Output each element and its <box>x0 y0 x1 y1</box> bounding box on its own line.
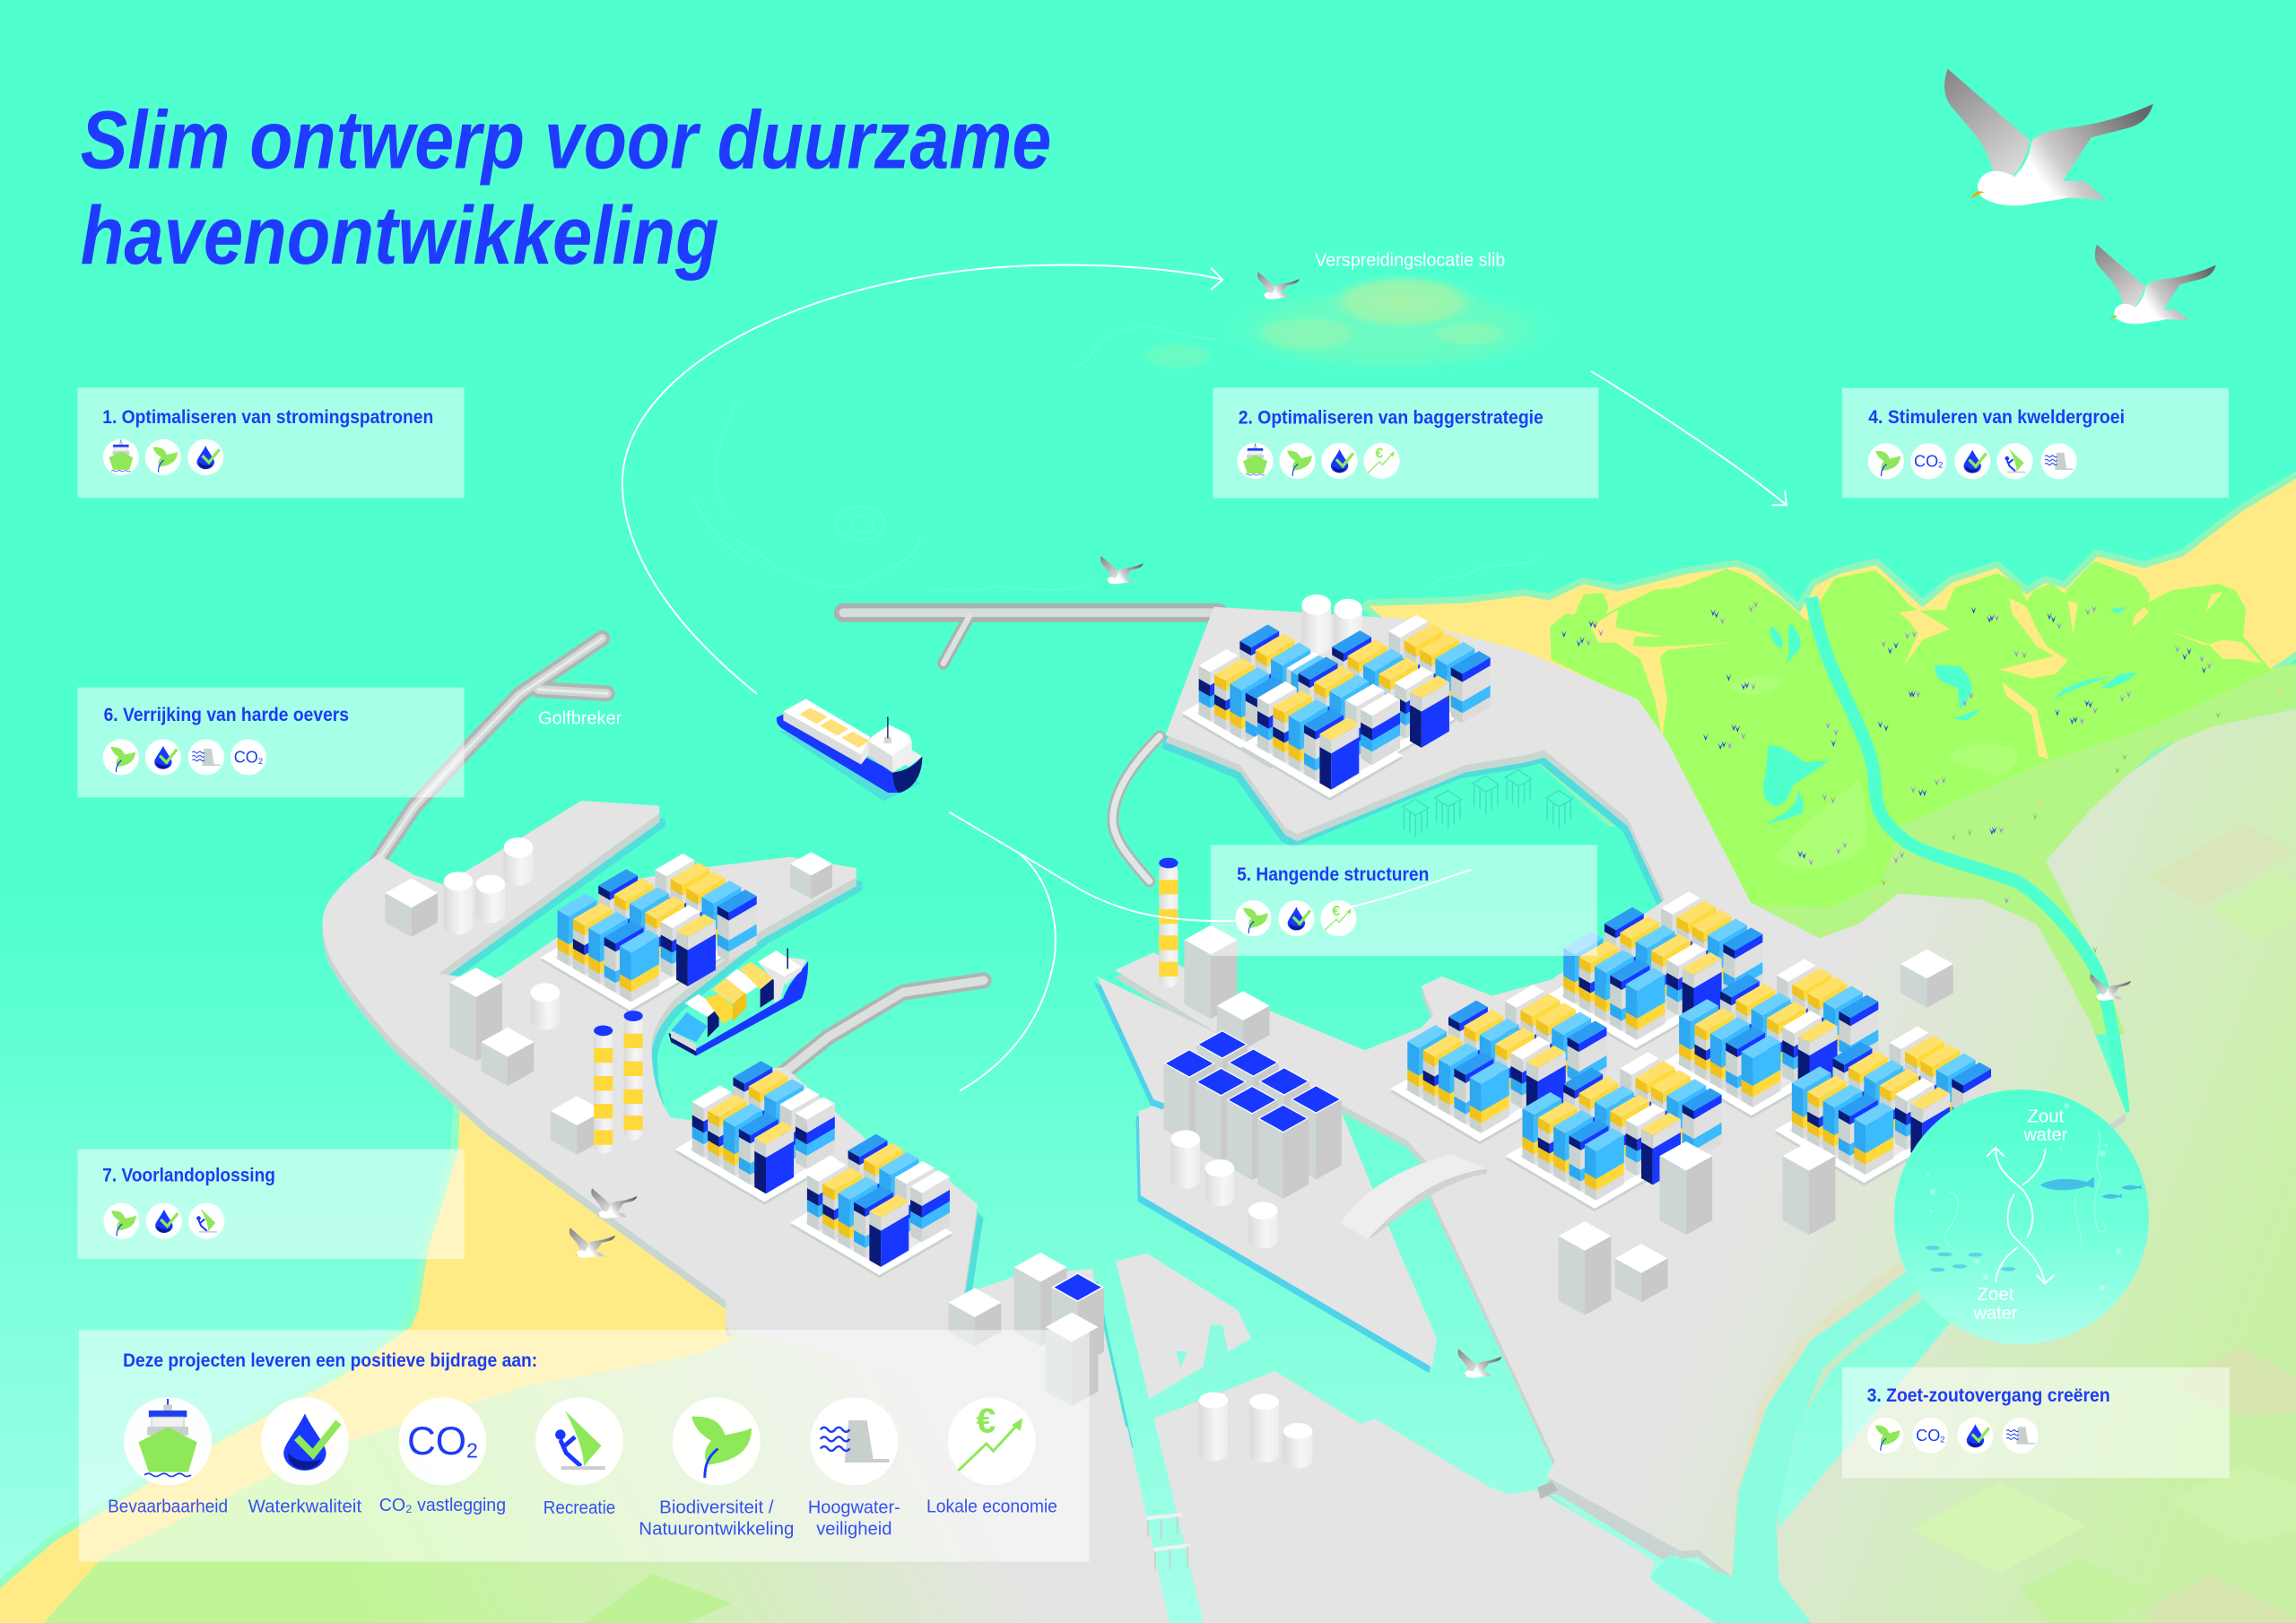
marsh grass tufts <box>1561 601 2282 953</box>
narrow island <box>1097 976 1219 1104</box>
lower centre land <box>1154 1371 1716 1623</box>
panel: 4 kweldergroei: 4. Stimuleren van kweldergroei <box>1868 407 2125 428</box>
breakwater hook <box>1113 736 1160 881</box>
right land <box>1115 607 2126 1576</box>
gull medium <box>2095 245 2216 324</box>
left pier water shadow <box>328 814 1134 1448</box>
farmland fields right <box>1911 823 2296 1623</box>
chimney and tower near section 5 <box>1159 858 1270 1050</box>
panel: 2 baggerstrategie <box>1213 387 1598 499</box>
beach bottom left <box>0 1108 735 1623</box>
container yard top harbour back <box>1274 615 1491 775</box>
panel: 4 kweldergroei: CO <box>1914 452 1938 470</box>
grid island <box>1139 1101 1437 1367</box>
legend icon: CO2 <box>398 1397 486 1485</box>
chimneys left pier <box>594 1011 643 1154</box>
pedestrian bridges over channel <box>1146 1515 1190 1569</box>
panel: 3 zoet-zoutovergang: 2 <box>1940 1435 1944 1444</box>
current flow wiggles <box>694 326 1537 592</box>
legend label: Lokale economie: Lokale economie <box>926 1497 1057 1517</box>
sediment dispersal site <box>1139 273 1560 373</box>
panel: 4 kweldergroei: 2 <box>1938 461 1943 470</box>
panel: legend <box>79 1330 1090 1562</box>
breakwater harbour mouth <box>783 980 984 1073</box>
panel: 3 zoet-zoutovergang: 3. Zoet-zoutovergang creëren <box>1867 1385 2110 1406</box>
breakwater top <box>843 612 1218 664</box>
right land water edge <box>1161 735 1663 906</box>
panel: 4 kweldergroei <box>1842 388 2229 498</box>
gull over beach <box>570 1228 615 1258</box>
legend icon: water quality <box>261 1397 349 1485</box>
grid island edge <box>1135 1107 1434 1373</box>
lock canal <box>1537 1481 1678 1562</box>
panel: 3 zoet-zoutovergang: CO <box>1916 1427 1940 1445</box>
tanks by solar grid <box>1170 1130 1278 1249</box>
legend label: Hoogwater: Hoogwater- <box>808 1497 900 1517</box>
legend icon: flood safety <box>810 1397 898 1485</box>
panel: 2 baggerstrategie: 2. Optimaliseren van baggerstrategie <box>1239 408 1544 429</box>
field lower left <box>586 1574 732 1623</box>
legend icon: local economy <box>948 1397 1036 1485</box>
tanks lower centre <box>1198 1393 1313 1469</box>
arched bridge <box>1341 1154 1487 1239</box>
panel: 1 stromingspatronen: 1. Optimaliseren van stromingspatronen <box>102 407 433 428</box>
container yard top harbour front <box>1240 656 1403 801</box>
panel: 7 voorlandoplossing: 7. Voorlandoplossing <box>102 1166 275 1186</box>
light green transition zone <box>1751 664 2296 1034</box>
circle: salt-fresh transition inset: water <box>1973 1304 2018 1324</box>
circle: salt-fresh transition inset: water <box>2022 1125 2067 1145</box>
circle: salt-fresh transition inset: Zoet <box>1978 1285 2014 1305</box>
gull over channel <box>1458 1349 1501 1378</box>
salt marsh <box>1553 563 2267 906</box>
legend label: Waterkwaliteit: Waterkwaliteit <box>248 1497 362 1517</box>
legend label: CO2 vastlegging: CO₂ vastlegging <box>379 1496 506 1515</box>
hanging structures <box>1403 770 1572 838</box>
solar grid building <box>1164 1030 1342 1199</box>
arrow: dispersal site to marsh <box>1591 371 1787 505</box>
legend label: Biodiversiteit: Biodiversiteit / <box>659 1497 774 1517</box>
panel: 6 harde oevers <box>78 688 465 797</box>
cargo ship at sea <box>777 699 922 801</box>
circle: salt-fresh transition inset: Zout <box>2027 1107 2065 1126</box>
flow lines from ship <box>949 812 1472 1091</box>
panel: 7 voorlandoplossing <box>78 1150 465 1259</box>
legend icon: CO2: 2 <box>466 1438 478 1462</box>
gull over pier <box>591 1188 638 1219</box>
panel: 3 zoet-zoutovergang <box>1842 1367 2230 1478</box>
circle: salt-fresh transition inset <box>1894 1089 2149 1344</box>
legend icon: recreation <box>535 1397 623 1485</box>
river lower reach <box>1650 1271 1926 1623</box>
panel: 5 hangende structuren: € <box>1332 903 1340 919</box>
panel: 2 baggerstrategie: € <box>1375 446 1383 462</box>
title: Slim ontwerp voor duurzame <box>81 95 1051 187</box>
label: Verspreidingslocatie slib: Verspreidingslocatie slib <box>1315 251 1505 271</box>
title <box>81 95 1051 282</box>
legend label: veiligheid: veiligheid <box>816 1520 891 1540</box>
gull large <box>1944 69 2153 205</box>
triangle island <box>1116 1254 1251 1399</box>
panel: 1 stromingspatronen <box>78 387 465 498</box>
breakwater left (Golfbreker) <box>378 638 607 861</box>
legend label: Natuurontwikkeling: Natuurontwikkeling <box>639 1520 794 1540</box>
arrow: dredged sediment to dispersal site <box>622 265 1222 694</box>
tanks and cubes left pier <box>385 838 832 1155</box>
legend heading: Deze projecten leveren een positieve bijdrage aan: <box>123 1350 537 1371</box>
label: Golfbreker: Golfbreker <box>538 709 622 729</box>
container yard lower pier A <box>675 1061 838 1205</box>
left pier quay side <box>323 810 1127 1444</box>
panel: 6 harde oevers: 2 <box>258 757 263 766</box>
far land right of the river <box>1738 708 2296 1623</box>
legend icon: CO2: CO <box>407 1419 466 1463</box>
panel: 6 harde oevers: 6. Verrijking van harde oevers <box>104 705 349 725</box>
container yard left pier upper <box>540 854 757 1013</box>
panel: 5 hangende structuren <box>1211 845 1597 956</box>
title: havenontwikkeling <box>81 190 719 282</box>
beach north of the salt marsh <box>1370 479 2296 820</box>
container yard lower pier B <box>790 1134 952 1278</box>
gull at dispersal site <box>1257 272 1300 299</box>
towers lower pier <box>948 1253 1104 1406</box>
container ship in basin <box>669 949 808 1055</box>
narrow island edge <box>1094 983 1216 1110</box>
legend label: Recreatie: Recreatie <box>544 1498 615 1518</box>
lower left farmland <box>44 1326 1170 1623</box>
legend label: Bevaarbaarheid: Bevaarbaarheid <box>108 1497 228 1517</box>
storage tanks top harbour <box>1301 595 1362 655</box>
towers right land <box>1559 950 1953 1315</box>
container yards right land <box>1390 891 1991 1211</box>
legend icon: ship <box>124 1397 212 1485</box>
panel: 5 hangende structuren: 5. Hangende structuren <box>1237 864 1429 885</box>
gull over river <box>2090 974 2131 1001</box>
panel: 6 harde oevers: CO <box>234 748 258 766</box>
river through the marsh <box>1812 597 2123 1113</box>
gull above top breakwater <box>1100 556 1144 584</box>
legend icon: local economy: € <box>977 1402 996 1441</box>
container yard top harbour left <box>1182 625 1344 768</box>
left pier <box>323 801 1127 1435</box>
right land quay side <box>1115 614 2126 1584</box>
river bank sand lower <box>1754 1277 1917 1576</box>
legend icon: biodiversity <box>673 1397 761 1485</box>
